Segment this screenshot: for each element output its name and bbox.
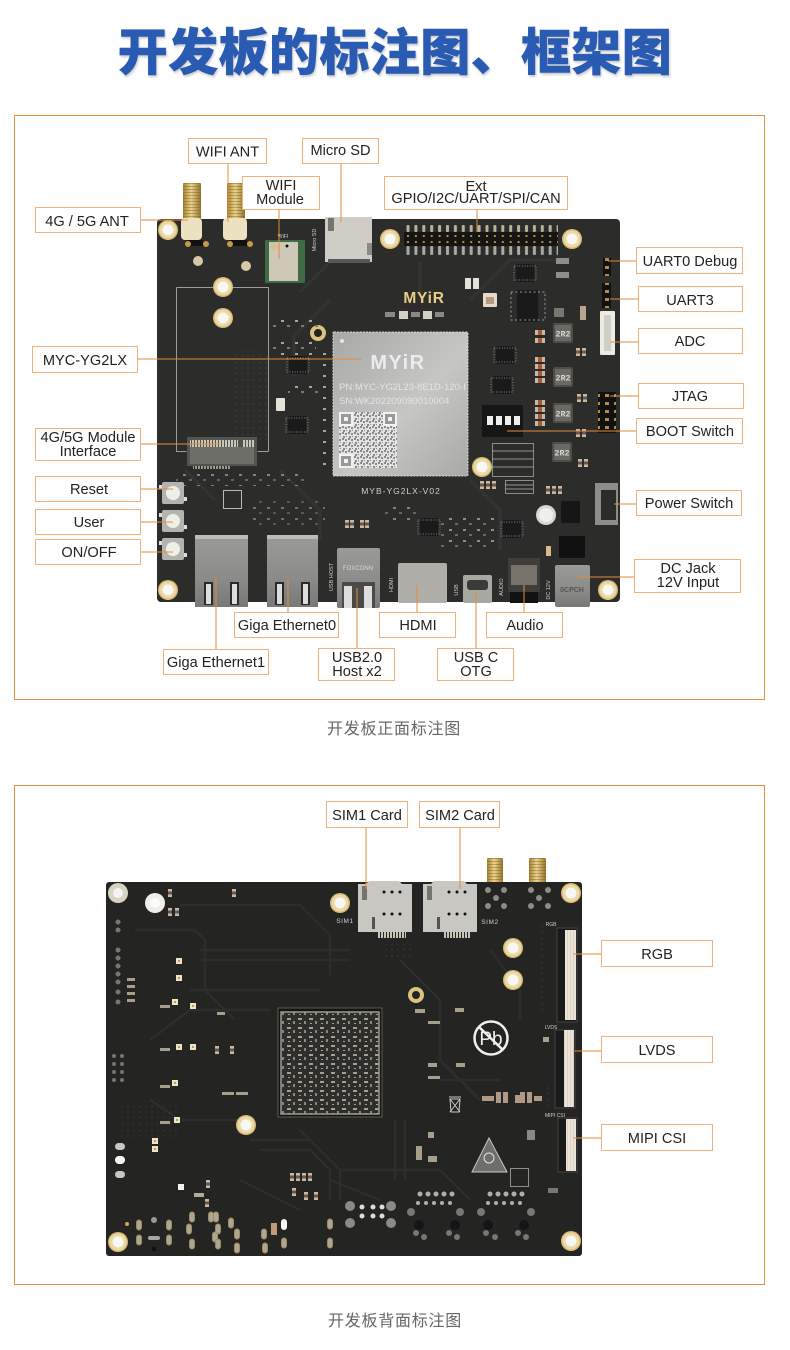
SoM module MYC-YG2LX: PN:MYC-YG2L23-8E1D-120-I — [339, 382, 466, 393]
recycle bin mark — [449, 1097, 461, 1112]
label: UART0 Debug — [636, 248, 742, 274]
label: MYC-YG2LX — [32, 346, 138, 372]
ADC connector — [600, 311, 615, 355]
caption: front: 开发板正面标注图 — [327, 720, 461, 738]
board silk labels: AUDIO — [499, 578, 505, 596]
label: Reset: Reset — [70, 482, 108, 498]
SIM card sockets — [336, 881, 499, 938]
MYIR logo: MYiR — [403, 290, 445, 307]
label: UART3 — [638, 286, 742, 312]
label: DC Jack 12V Input: DC Jack — [660, 561, 716, 577]
M.2 4G/5G connector — [187, 437, 257, 469]
SIM1 socket: SIM1 — [336, 918, 354, 925]
SMA through-hole pads — [485, 887, 551, 909]
label: User: User — [74, 515, 105, 531]
label: 4G / 5G ANT — [36, 208, 140, 232]
label: 4G/5G Module Interface — [36, 428, 140, 460]
boot tables — [492, 444, 534, 494]
title: 开发板的标注图、框架图 — [118, 25, 672, 81]
label: MIPI CSI — [602, 1124, 712, 1150]
label: Giga Ethernet1: Giga Ethernet1 — [167, 655, 265, 671]
label: Audio — [486, 612, 562, 638]
label: SIM1 Card: SIM1 Card — [332, 808, 402, 824]
label: UART0 Debug: UART0 Debug — [643, 254, 737, 270]
label: HDMI — [380, 612, 456, 638]
label: SIM1 Card — [326, 802, 408, 828]
DC jack: 0CPCH — [560, 587, 584, 594]
label: Micro SD: Micro SD — [310, 143, 370, 159]
label: Power Switch — [636, 490, 742, 516]
label: ON/OFF: ON/OFF — [61, 545, 117, 561]
Ethernet 0 jack — [267, 535, 318, 607]
center component cluster — [278, 1008, 382, 1117]
label: Giga Ethernet0 — [234, 612, 338, 638]
barcode square — [510, 1168, 528, 1186]
board silk labels: DC 12V — [546, 580, 552, 600]
label: Ext GPIO: Ext — [465, 179, 487, 195]
power parts — [536, 501, 585, 558]
LVDS connector: LVDS — [545, 1025, 558, 1031]
label: MIPI CSI: MIPI CSI — [628, 1131, 686, 1147]
back bottom pads — [345, 1192, 535, 1240]
label: USB2.0 Host x2 — [318, 648, 394, 680]
back SMA connectors — [487, 858, 546, 883]
back small parts — [112, 889, 558, 1253]
label: RGB: RGB — [641, 947, 673, 963]
mounting holes — [158, 220, 618, 600]
label: ON/OFF — [36, 540, 140, 564]
label: JTAG — [638, 384, 744, 408]
label: ADC: ADC — [675, 334, 705, 350]
label: UART3: UART3 — [666, 293, 714, 309]
caption: back: 开发板背面标注图 — [328, 1312, 462, 1330]
label: JTAG: JTAG — [672, 389, 708, 405]
front PCB board — [157, 217, 620, 608]
USB host connector — [337, 548, 380, 608]
label: Ext GPIO: GPIO/I2C/UART/SPI/CAN — [391, 191, 561, 207]
LVDS connector — [545, 1025, 575, 1108]
WiFi module: WIFI — [278, 234, 288, 240]
label: Ext GPIO — [384, 176, 568, 210]
board silk labels: USB HOST — [329, 562, 335, 591]
top right small parts — [385, 258, 586, 322]
label: WIFI Module — [242, 176, 320, 210]
front leader lines — [138, 164, 638, 649]
label: WIFI Module: WIFI — [266, 178, 296, 194]
small components — [176, 318, 588, 548]
back leader lines — [366, 828, 601, 1138]
label: Audio: Audio — [506, 618, 544, 634]
lead-free Pb mark — [474, 1022, 508, 1054]
label: 4G/5G Module Interface: 4G/5G Module — [41, 430, 135, 446]
DC jack — [555, 565, 590, 607]
label: LVDS — [602, 1036, 712, 1062]
label: Micro SD — [302, 138, 378, 164]
label: USB2.0 Host x2: USB2.0 — [332, 650, 382, 666]
label: DC Jack 12V Input — [634, 560, 740, 592]
label: LVDS: LVDS — [638, 1043, 676, 1059]
expansion GPIO header — [404, 225, 558, 255]
SoM module MYC-YG2LX: SN:WK202209090010004 — [339, 396, 449, 407]
panel: back annotated diagram — [14, 786, 764, 1284]
MIPI CSI connector — [545, 1113, 577, 1172]
bottom connectors — [195, 535, 590, 608]
label: MYC-YG2LX: MYC-YG2LX — [43, 353, 127, 369]
Micro SD slot: Micro SD — [312, 229, 318, 251]
label: 4G/5G Module Interface: Interface — [60, 444, 116, 460]
SMA antenna connectors — [183, 183, 245, 221]
Micro SD slot — [312, 217, 372, 263]
label: USB2.0 Host x2: Host x2 — [332, 664, 382, 680]
board silk labels: HDMI — [389, 578, 395, 592]
JTAG header — [598, 392, 616, 433]
label: USB C OTG: OTG — [460, 664, 492, 680]
audio jack — [508, 558, 540, 603]
label: HDMI: HDMI — [399, 618, 437, 634]
panel: front annotated diagram — [14, 116, 764, 700]
board silk labels: USB — [454, 584, 460, 596]
board silk labels — [329, 562, 552, 600]
lead-free Pb mark: Pb — [479, 1029, 503, 1050]
label: Power Switch: Power Switch — [645, 496, 733, 512]
label: User — [36, 510, 140, 534]
label: BOOT Switch: BOOT Switch — [646, 424, 734, 440]
label: WIFI ANT — [188, 138, 266, 164]
power switch — [595, 483, 618, 525]
label: WIFI Module: Module — [256, 192, 304, 208]
label: Reset — [36, 476, 140, 502]
RGB connector: RGB — [546, 922, 557, 928]
debug headers — [602, 258, 611, 308]
RGB connector — [537, 922, 577, 1022]
SIM2 socket: SIM2 — [481, 919, 499, 926]
QR code — [339, 412, 397, 468]
label: SIM2 Card — [420, 802, 500, 828]
back PCB board — [106, 881, 582, 1256]
push buttons — [159, 482, 187, 560]
label: RGB — [602, 940, 712, 966]
SoM module MYC-YG2LX: MYiR — [370, 352, 426, 374]
label: Giga Ethernet1 — [164, 650, 268, 674]
label: SIM2 Card: SIM2 Card — [425, 808, 495, 824]
WiFi module — [265, 234, 305, 283]
MIPI CSI connector: MIPI CSI — [545, 1113, 565, 1119]
ESD warning triangle — [472, 1138, 507, 1172]
SIM2 socket — [423, 881, 499, 938]
USB C connector — [463, 575, 492, 603]
HDMI connector — [398, 563, 447, 603]
label: USB C OTG — [438, 648, 514, 680]
gold SMA bodies — [181, 218, 253, 271]
label: BOOT Switch — [636, 418, 742, 444]
Ethernet 1 jack — [195, 535, 248, 607]
SoM module MYC-YG2LX — [333, 332, 468, 476]
label: WIFI ANT: WIFI ANT — [196, 144, 259, 160]
label: USB C OTG: USB C — [454, 650, 498, 666]
label: DC Jack 12V Input: 12V Input — [657, 575, 719, 591]
board revision silk: MYB-YG2LX-V02 — [361, 486, 441, 496]
SIM1 socket — [336, 881, 412, 938]
label: Giga Ethernet0: Giga Ethernet0 — [238, 618, 336, 634]
inductors — [552, 323, 573, 462]
label: ADC — [638, 328, 742, 354]
label: 4G / 5G ANT: 4G / 5G ANT — [45, 214, 129, 230]
boot DIP switch — [482, 405, 523, 437]
USB host connector: FOXCONN — [343, 566, 373, 572]
back mounting holes — [108, 883, 581, 1252]
